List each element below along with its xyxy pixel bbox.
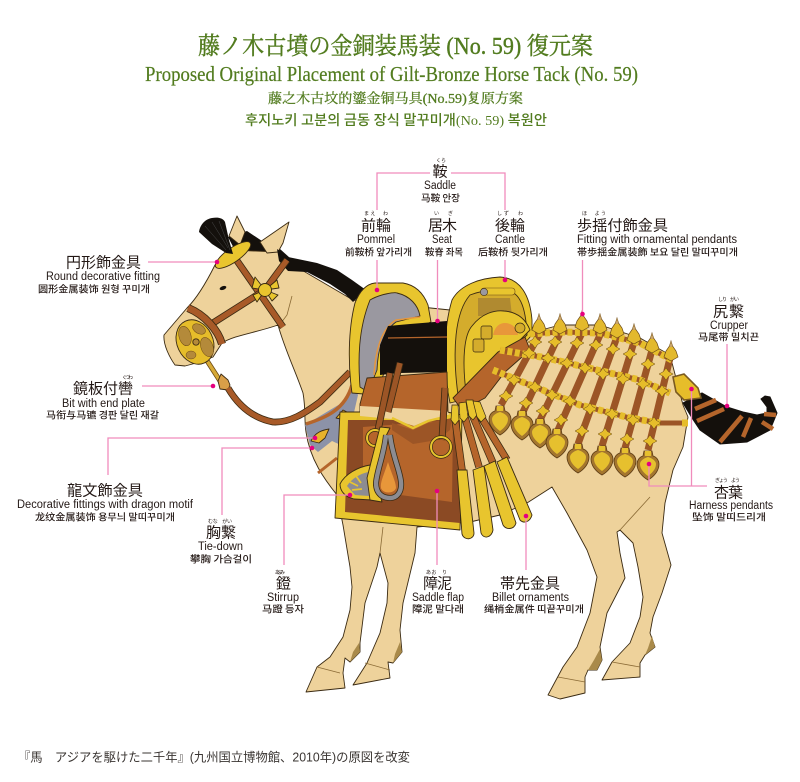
- horse illustration: [164, 216, 777, 699]
- label: stirrup: [262, 569, 304, 616]
- label: stirrup: Stirrup: [267, 592, 299, 604]
- top finials: [532, 311, 678, 361]
- label: stirrup: あぶみ: [275, 569, 285, 576]
- label: billet ornaments: Billet ornaments: [492, 592, 569, 604]
- crown mane behind ears: [228, 231, 290, 272]
- title: Japanese: 藤ノ木古墳の金銅装馬装 (No. 59) 復元案: [198, 33, 593, 60]
- label: cantle: Cantle: [495, 234, 525, 246]
- saddle leather: [360, 372, 448, 412]
- label: fitting with ornamental pendants: ほ よう: [582, 210, 606, 217]
- label: cantle: しず わ: [497, 210, 523, 217]
- label: bit with end plate: [46, 374, 159, 422]
- dragon motif breast fitting: [311, 410, 349, 443]
- billet ornaments: [451, 400, 532, 539]
- label: decorative fittings with dragon motif: 龙纹金属装饰 용무늬 말띠꾸미개: [35, 510, 175, 524]
- mane: [277, 249, 366, 302]
- label: saddle flap: [412, 569, 464, 616]
- label: saddle flap: あお り: [426, 569, 447, 576]
- label: saddle flap: Saddle flap: [412, 592, 464, 604]
- label: fitting with ornamental pendants: Fitting with ornamental pendants: [577, 234, 737, 246]
- label: bit with end plate: 鏡板付轡: [73, 380, 133, 398]
- label: billet ornaments: [484, 576, 584, 616]
- title: English: Proposed Original Placement of Gilt-Bronze Horse Tack (No. 59): [145, 62, 638, 86]
- label: round decorative fitting: 圆形金属装饰 원형 꾸미개: [38, 282, 150, 296]
- horse body: [164, 250, 688, 699]
- callout: saddle flap leader: [435, 489, 439, 565]
- label: saddle: [421, 157, 460, 204]
- label: bit with end plate: くつわ: [122, 374, 133, 381]
- label: harness pendants: Harness pendants: [689, 500, 773, 512]
- crupper harness: [489, 311, 701, 480]
- pommel: [349, 283, 431, 395]
- callout: bit leader: [142, 384, 215, 388]
- callout lines for the saddle: [377, 173, 505, 210]
- label: bit with end plate: Bit with end plate: [62, 398, 145, 410]
- cantle bosses: [473, 323, 525, 352]
- label: saddle: Saddle: [424, 180, 456, 192]
- label: pommel: 前輪: [361, 218, 391, 234]
- label: harness pendants: ぎょう よう: [715, 477, 740, 484]
- headstall and straps: [188, 255, 287, 344]
- straps and rings: [367, 363, 451, 457]
- label: seat: Seat: [432, 234, 453, 246]
- label: crupper: しり がい: [718, 296, 739, 303]
- stirrup: [367, 427, 401, 502]
- callout: billet leader: [524, 514, 528, 570]
- label: crupper: Crupper: [710, 320, 748, 332]
- saddle flap frame: [335, 412, 462, 530]
- label: tie-down: むな がい: [208, 518, 232, 525]
- label: saddle: 马鞍 안장: [421, 190, 460, 204]
- label: tie-down: [190, 518, 252, 566]
- callout: harness pendants leader: [647, 387, 707, 486]
- label: fitting with ornamental pendants: 帯歩揺金属装飾 보요 달린 말띠꾸미개: [577, 244, 738, 258]
- label: cantle: 後輪: [495, 218, 525, 234]
- label: cantle: [478, 210, 548, 258]
- label: tie-down: 胸繋: [206, 524, 236, 542]
- reins: [228, 372, 352, 473]
- gold ornaments along straps: [493, 332, 672, 423]
- callout: pommel leader: [375, 260, 379, 292]
- label: harness pendants: 杏葉: [714, 484, 743, 502]
- label: fitting with ornamental pendants: [577, 210, 738, 258]
- label: decorative fittings with dragon motif: 龍文飾金具: [67, 482, 143, 500]
- label: decorative fittings with dragon motif: [17, 482, 194, 524]
- label: saddle: くら: [436, 157, 446, 164]
- callout: cantle leader: [503, 260, 507, 282]
- fetlock tufts: [350, 636, 655, 670]
- label: cantle: 后鞍桥 뒷가리개: [478, 244, 548, 258]
- cantle: [445, 277, 532, 403]
- label: seat: 鞍脊 좌목: [425, 244, 463, 258]
- label: saddle flap: 障泥: [423, 576, 452, 592]
- label: crupper: 马尾带 밀치끈: [698, 330, 759, 344]
- cream and gold scallop: [360, 406, 452, 444]
- label: billet ornaments: 帯先金具: [500, 576, 560, 592]
- label: bit with end plate: 马衔与马镳 경판 달린 재갈: [46, 408, 159, 422]
- body lines and eye: [278, 296, 650, 682]
- label: pommel: Pommel: [357, 234, 395, 246]
- label: fitting with ornamental pendants: 歩揺付飾金具: [577, 218, 668, 234]
- source credit: 『馬 アジアを駆けた二千年』(九州国立博物館、2010年)の原図を改変: [18, 750, 410, 764]
- label: seat: [425, 210, 463, 258]
- callout: dragon fitting leader: [108, 436, 317, 475]
- callout: crupper leader: [725, 344, 729, 408]
- title block: [145, 33, 638, 129]
- strap junction ornaments: [499, 336, 673, 447]
- crupper end shield: [673, 374, 701, 400]
- callout: stirrup leader: [284, 493, 352, 565]
- label: stirrup: 鐙: [276, 576, 291, 592]
- seat: [380, 321, 447, 375]
- label: crupper: [698, 296, 759, 344]
- label: seat: 居木: [428, 218, 457, 234]
- label: decorative fittings with dragon motif: Decorative fittings with dragon motif: [17, 499, 194, 511]
- label: pommel: [345, 210, 412, 258]
- label: saddle: 鞍: [432, 164, 448, 180]
- callout: round fitting leader: [148, 260, 219, 264]
- forelock plume: [199, 218, 233, 254]
- callout: ornamental pendants leader: [580, 260, 585, 316]
- tail: [683, 393, 777, 444]
- label: harness pendants: 坠饰 말띠드리개: [692, 510, 766, 524]
- label: billet ornaments: 绳梢金属件 띠끝꾸미개: [484, 602, 584, 616]
- label: pommel: 前鞍桥 앞가리개: [345, 244, 412, 258]
- vertical straps: [501, 333, 670, 450]
- title: Chinese: 藤之木古坟的鎏金铜马具(No.59)复原方案: [268, 90, 524, 106]
- grey-blue chest backing: [305, 382, 358, 452]
- apricot-leaf pendants: [489, 406, 659, 480]
- label: crupper: 尻繋: [713, 304, 744, 320]
- crupper strap over cantle: [453, 337, 530, 410]
- cross straps: [493, 332, 687, 423]
- label: round decorative fitting: 円形飾金具: [66, 254, 141, 272]
- label: stirrup: 马蹬 등자: [262, 602, 304, 616]
- label: round decorative fitting: Round decorative fitting: [46, 271, 160, 283]
- bit with end plate: [169, 314, 230, 390]
- rosette on cheek strap: [252, 277, 279, 302]
- label: tie-down: 攀胸 가슴걸이: [190, 552, 252, 566]
- callout: tie-down leader: [222, 446, 314, 515]
- round decorative fitting: [212, 237, 254, 273]
- label: tie-down: Tie-down: [198, 541, 243, 553]
- saddle flap inner: [345, 420, 460, 523]
- ears: [229, 216, 289, 253]
- callout: seat leader: [435, 260, 440, 323]
- label: harness pendants: [689, 477, 773, 524]
- label: seat: い ぎ: [434, 210, 453, 217]
- label: pommel: まえ わ: [364, 210, 388, 217]
- label: saddle flap: 障泥 말다래: [412, 602, 464, 616]
- label: round decorative fitting: [38, 254, 160, 296]
- title: Korean: 후지노키 고분의 금동 장식 말꾸미개(No. 59) 복원안: [245, 113, 547, 129]
- dragon motif fitting on saddle: [340, 465, 372, 500]
